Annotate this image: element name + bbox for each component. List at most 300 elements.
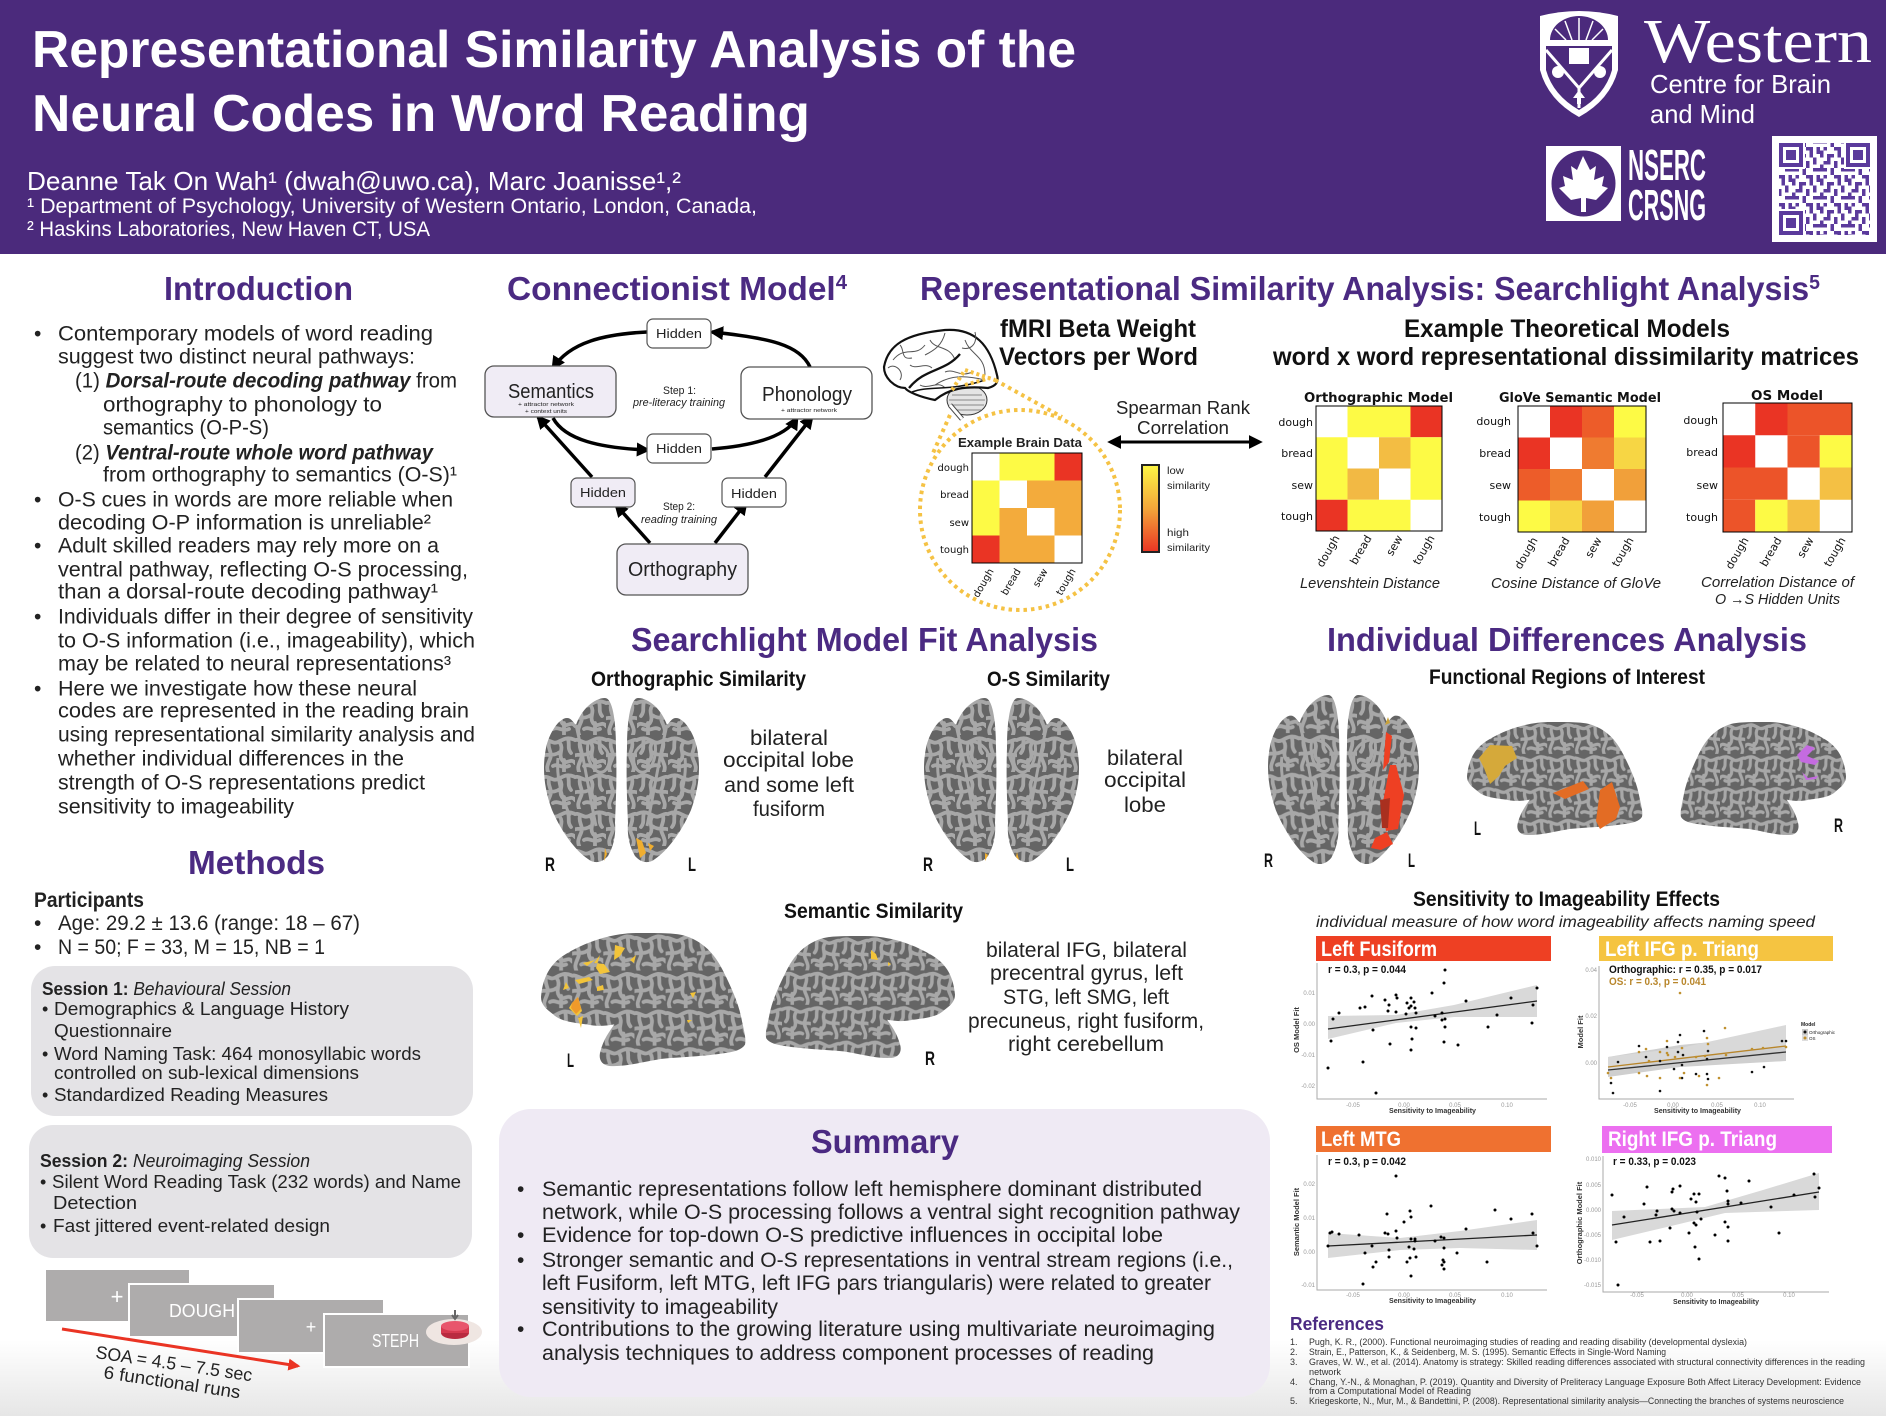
node: Hidden top: Hidden xyxy=(656,326,702,341)
summary bullet list: Contributions to the growing literature using multivariate neuroimaging xyxy=(542,1318,1215,1341)
session 2 card: • xyxy=(40,1216,46,1236)
heatmap: orthographic model: Orthographic Model xyxy=(1304,391,1453,406)
scatter plot: Left Fusiform xyxy=(1292,936,1551,1115)
icon: NSERC logo: NSERC xyxy=(1628,141,1706,190)
participants block: N = 50; F = 33, M = 15, NB = 1 xyxy=(58,936,325,959)
scatter plot: Left IFG p. Triang: 0.00 xyxy=(1667,1103,1679,1109)
heatmap: OS model: sew xyxy=(1795,535,1817,560)
node: Orthography: Orthography xyxy=(628,559,737,581)
reference list: Kriegeskorte, N., Mur, M., & Bandettini, P. (2008). Representational similarity analysis—Connecting the branches of systems neuroscience xyxy=(1309,1396,1844,1406)
scatter plot: Left MTG: Left MTG xyxy=(1321,1128,1401,1151)
session 1 card: • xyxy=(42,1085,48,1105)
legend: similarity colour bar: high xyxy=(1167,527,1189,539)
scatter plot: Left MTG: 0.02 xyxy=(1303,1182,1316,1188)
subheading: example theoretical models: word x word representational dissimilarity matrices xyxy=(1272,343,1859,371)
description xyxy=(723,727,854,821)
authors and affiliations: ¹ Department of Psychology, University of Western Ontario, London, Canada, xyxy=(27,195,757,218)
introduction bullet list: may be related to neural representations³ xyxy=(58,652,451,676)
scatter plot: Left IFG p. Triang: 0.04 xyxy=(1585,968,1598,974)
logo text: Western Centre for Brain and Mind: Centre for Brain xyxy=(1650,69,1831,99)
introduction bullet list: sensitivity to imageability xyxy=(58,796,295,818)
introduction bullet list: suggest two distinct neural pathways: xyxy=(58,346,415,368)
scatter plot: Left IFG p. Triang: 0.10 xyxy=(1754,1103,1766,1109)
heading: Connectionist Model: 4 xyxy=(836,272,848,294)
scatter plot: Left Fusiform: r = 0.3, p = 0.044 xyxy=(1328,964,1407,976)
summary bullet list xyxy=(517,1178,1241,1365)
scatter plot: Right IFG p. Triang: -0.010 xyxy=(1584,1258,1602,1264)
node: Semantics: + context units xyxy=(525,409,567,415)
stimulus timeline: + xyxy=(111,1284,123,1309)
arrow: trial timeline xyxy=(62,1329,298,1366)
heatmap: example brain data: sew xyxy=(949,518,969,529)
introduction bullet list: • xyxy=(34,678,41,700)
scatter plot: Left MTG: Semantic Model Fit xyxy=(1292,1187,1301,1256)
heading: Introduction: Introduction xyxy=(164,270,353,307)
heatmap: GloVe semantic model: GloVe Semantic Model xyxy=(1499,391,1661,406)
description: precuneus, right fusiform, xyxy=(968,1010,1204,1033)
heatmap: GloVe semantic model: Cosine Distance of GloVe xyxy=(1491,575,1661,592)
summary bullet list: Semantic representations follow left hemisphere dominant distributed xyxy=(542,1178,1202,1201)
scatter plot: Left MTG xyxy=(1292,1126,1551,1305)
brain: ventral view with fusiform ROI xyxy=(1268,695,1419,864)
legend: similarity colour bar: similarity xyxy=(1167,480,1211,492)
subpanel: semantic similarity: Semantic Similarity xyxy=(784,900,963,923)
node: Orthography xyxy=(617,544,748,595)
subheading: functional regions of interest: Functional Regions of Interest xyxy=(1429,666,1705,689)
heatmap: orthographic model: bread xyxy=(1281,447,1313,460)
scatter plot: Right IFG p. Triang: 0.00 xyxy=(1681,1293,1693,1299)
logo text: Western Centre for Brain and Mind xyxy=(1644,8,1872,129)
node: Hidden middle: Hidden xyxy=(656,441,702,456)
scatter plot: Right IFG p. Triang: 0.10 xyxy=(1783,1293,1795,1299)
scatter plot: Right IFG p. Triang: 0.005 xyxy=(1586,1183,1602,1189)
stimulus timeline: + xyxy=(306,1317,316,1337)
subheading: example theoretical models: Example Theoretical Models xyxy=(1404,315,1730,343)
panel: individual differences analysis: L xyxy=(1408,851,1415,872)
heatmap: OS model: dough xyxy=(1723,535,1752,571)
node: Phonology: Phonology xyxy=(762,384,852,406)
session 1 card: Demographics & Language History xyxy=(54,999,349,1019)
node: Semantics: + attractor network xyxy=(518,402,574,408)
subheading: sensitivity to imageability: individual measure of how word imageability affects naming speed xyxy=(1316,914,1816,931)
description: occipital lobe xyxy=(723,749,854,772)
introduction bullet list: Individuals differ in their degree of sensitivity xyxy=(58,606,473,628)
panel: individual differences analysis: R xyxy=(1264,851,1273,872)
reference list xyxy=(1290,1337,1865,1406)
panel: references xyxy=(1290,1314,1865,1406)
reference list: network xyxy=(1309,1367,1342,1377)
scatter plot: Left Fusiform: OS Model Fit xyxy=(1292,1007,1301,1053)
description: right cerebellum xyxy=(1008,1033,1164,1056)
introduction bullet list: Adult skilled readers may rely more on a xyxy=(58,534,439,558)
scatter plot: Left Fusiform: 0.00 xyxy=(1398,1103,1410,1109)
introduction bullet list xyxy=(34,322,475,818)
scatter plot: Left MTG: 0.05 xyxy=(1449,1293,1461,1299)
introduction bullet list: Here we investigate how these neural xyxy=(58,678,417,700)
heading: Summary: Summary xyxy=(811,1123,960,1160)
description xyxy=(968,939,1204,1056)
heatmap: OS model: bread xyxy=(1686,446,1718,459)
subpanel: orthographic similarity xyxy=(544,668,854,876)
scatter plot: Left IFG p. Triang: Left IFG p. Triang xyxy=(1605,938,1759,961)
scatter plot: Left Fusiform: -0.02 xyxy=(1301,1084,1316,1090)
heatmap: GloVe semantic model: tough xyxy=(1479,511,1511,524)
description: and some left xyxy=(724,774,854,797)
scatter plot: Right IFG p. Triang: -0.05 xyxy=(1630,1293,1644,1299)
scatter plot: Right IFG p. Triang: Orthographic Model Fit xyxy=(1575,1181,1584,1264)
heatmap: orthographic model: tough xyxy=(1281,510,1313,523)
scatter plot: Left MTG: 0.00 xyxy=(1398,1293,1410,1299)
node: Phonology xyxy=(741,367,872,419)
scatter plot: Right IFG p. Triang xyxy=(1575,1126,1832,1306)
introduction bullet list: than a dorsal-route decoding pathway¹ xyxy=(58,580,438,604)
heading: Connectionist Model: Connectionist Model xyxy=(507,270,832,307)
heading: RSA searchlight: 5 xyxy=(1809,272,1820,294)
description: fusiform xyxy=(753,798,825,821)
page background fade xyxy=(0,1340,1886,1416)
description: bilateral xyxy=(750,727,828,750)
label: Step 2 xyxy=(641,501,718,526)
session 1 card: Session 1: Behavioural Session xyxy=(42,979,291,999)
session 1 card: controlled on sub-lexical dimensions xyxy=(54,1063,359,1083)
panel: connectionist model xyxy=(485,270,872,595)
reference list: Graves, W. W., et al. (2014). Anatomy is strategy: Skilled reading differences associated with structural connectivity differences in the reading xyxy=(1309,1357,1865,1367)
diagram: triangle model arrows xyxy=(538,332,812,543)
heatmap: GloVe semantic model: bread xyxy=(1545,535,1573,569)
node: Hidden right: Hidden xyxy=(731,486,777,501)
heading: References: References xyxy=(1290,1314,1384,1334)
label: Step 2: reading training xyxy=(641,514,718,526)
session 1 card: Standardized Reading Measures xyxy=(54,1085,328,1105)
heatmap: example brain data: Example Brain Data xyxy=(958,436,1083,450)
panel: representational similarity analysis xyxy=(884,270,1859,610)
summary bullet list: • xyxy=(517,1178,524,1201)
heading: Individual Differences Analysis: Individual Differences Analysis xyxy=(1327,621,1807,658)
summary bullet list: analysis techniques to address component processes of reading xyxy=(542,1342,1154,1365)
subpanel: O-S similarity: O-S Similarity xyxy=(987,668,1110,691)
reference list: Pugh, K. R., (2000). Functional neuroimaging studies of reading and reading disability (developmental dyslexia) xyxy=(1309,1337,1747,1347)
heatmap: OS model xyxy=(1683,389,1856,608)
introduction bullet list: • xyxy=(34,488,41,512)
brain: ventral view xyxy=(924,698,1079,862)
scatter plot: Right IFG p. Triang: -0.005 xyxy=(1584,1233,1602,1239)
heatmap: OS model: OS Model xyxy=(1751,389,1823,404)
reference list: 3. xyxy=(1290,1357,1298,1367)
heatmap: OS model: sew xyxy=(1696,479,1718,492)
description: occipital xyxy=(1104,769,1186,792)
heatmap: OS model: O →S Hidden Units xyxy=(1715,591,1840,608)
stimulus timeline: DOUGH xyxy=(169,1301,235,1321)
subpanel: O-S similarity xyxy=(923,668,1186,876)
introduction bullet list: whether individual differences in the xyxy=(57,748,404,770)
panel: summary xyxy=(499,1109,1270,1397)
scatter plot: Left IFG p. Triang: -0.05 xyxy=(1623,1103,1637,1109)
subheading: fMRI beta weight vectors: fMRI Beta Weight xyxy=(1000,315,1197,343)
heading: Methods: Methods xyxy=(188,844,325,881)
subpanel: O-S similarity: L xyxy=(1066,855,1074,876)
icon: brain line drawing xyxy=(884,330,998,419)
heading: RSA searchlight: Representational Similarity Analysis: Searchlight Analysis xyxy=(920,270,1833,307)
legend: similarity colour bar: similarity xyxy=(1167,542,1211,554)
summary bullet list: left Fusiform, left MTG, left IFG pars triangularis) were related to greater xyxy=(542,1272,1211,1295)
heatmap: GloVe semantic model: dough xyxy=(1512,535,1541,571)
icon: QR code xyxy=(1772,136,1877,242)
scatter plot: Right IFG p. Triang: 0.05 xyxy=(1732,1293,1744,1299)
reference list: 5. xyxy=(1290,1396,1298,1406)
introduction bullet list: using representational similarity analysis and xyxy=(58,724,475,746)
subheading: fMRI beta weight vectors xyxy=(999,315,1198,371)
reference list: Strain, E., Patterson, K., & Seidenberg, M. S. (1995). Semantic Effects in Single-Word Naming xyxy=(1309,1347,1666,1357)
brain: right lateral with IFG ROI xyxy=(1681,722,1846,835)
summary bullet list: • xyxy=(517,1224,524,1247)
introduction bullet list: strength of O-S representations predict xyxy=(58,772,425,794)
scatter plot: Left Fusiform: 0.01 xyxy=(1303,991,1316,997)
legend: model: Model xyxy=(1801,1022,1816,1028)
authors and affiliations: Deanne Tak On Wah¹ (dwah@uwo.ca), Marc Joanisse¹,² xyxy=(27,166,681,196)
heatmap: GloVe semantic model: bread xyxy=(1479,447,1511,460)
introduction bullet list: (1) Dorsal-route decoding pathway from xyxy=(75,370,457,392)
description: bilateral xyxy=(1107,747,1183,770)
heatmap: example brain data: tough xyxy=(940,545,969,556)
brain: left lateral xyxy=(541,933,745,1066)
legend: model: OS xyxy=(1809,1036,1816,1041)
scatter plot: Left IFG p. Triang: Sensitivity to Imageability xyxy=(1654,1106,1742,1115)
poster title: Neural Codes in Word Reading xyxy=(32,85,810,143)
summary bullet list: • xyxy=(517,1318,524,1341)
introduction bullet list: from orthography to semantics (O-S)¹ xyxy=(103,464,457,486)
heatmap: OS model: Correlation Distance of xyxy=(1701,574,1856,591)
node: Hidden middle xyxy=(647,434,711,463)
panel: introduction xyxy=(34,270,475,818)
node: Hidden right xyxy=(722,478,786,507)
panel: methods xyxy=(29,844,482,1402)
scatter plot: Left IFG p. Triang: 0.05 xyxy=(1711,1103,1723,1109)
heatmap: example brain data: sew xyxy=(1031,567,1051,589)
brain: left lateral with IFG and MTG ROIs xyxy=(1467,722,1642,835)
node: Hidden left: Hidden xyxy=(580,485,626,500)
stimulus timeline: STEPH xyxy=(372,1331,419,1351)
scatter plot: Right IFG p. Triang: 0.000 xyxy=(1586,1208,1602,1214)
heatmap: orthographic model: sew xyxy=(1384,533,1406,558)
subheading: example theoretical models xyxy=(1272,315,1859,371)
scatter plot: Left Fusiform: Sensitivity to Imageability xyxy=(1389,1106,1477,1115)
session 2 card: Detection xyxy=(53,1193,137,1213)
session 1 card xyxy=(31,966,473,1116)
scatter plot: Right IFG p. Triang: Sensitivity to Imageability xyxy=(1673,1297,1760,1306)
subheading: sensitivity to imageability xyxy=(1316,888,1816,931)
summary bullet list: network, while O-S processing follows a ventral sight recognition pathway xyxy=(542,1201,1241,1224)
heatmap: example brain data: dough xyxy=(971,567,997,600)
subpanel: orthographic similarity: R xyxy=(545,855,555,876)
session 1 card: Word Naming Task: 464 monosyllabic words xyxy=(54,1044,421,1064)
brain: ventral view xyxy=(544,698,699,862)
label: Step 1: Step 1: xyxy=(663,385,696,397)
scatter plot: Left IFG p. Triang: OS: r = 0.3, p = 0.041 xyxy=(1609,976,1706,988)
icon: NSERC logo xyxy=(1546,141,1706,230)
subpanel: semantic similarity xyxy=(541,900,1204,1072)
scatter plot: Left Fusiform: Left Fusiform xyxy=(1321,938,1437,961)
introduction bullet list: to O-S information (i.e., imageability), which xyxy=(58,630,475,652)
icon: response button xyxy=(426,1310,482,1345)
reference list: from a Computational Model of Reading xyxy=(1309,1386,1471,1396)
poster title xyxy=(32,21,1076,143)
node: Hidden left xyxy=(571,478,635,507)
heatmap: OS model: tough xyxy=(1821,535,1849,569)
reference list: 4. xyxy=(1290,1377,1298,1387)
SOA caption: SOA = 4.5 – 7.5 sec xyxy=(94,1342,254,1385)
heatmap: orthographic model: sew xyxy=(1292,479,1313,492)
subpanel: orthographic similarity: Orthographic Similarity xyxy=(591,668,806,691)
session 2 card: Session 2: Neuroimaging Session xyxy=(40,1151,310,1171)
callout: dotted zoom circle xyxy=(920,380,1120,610)
scatter plot: Left Fusiform: 0.00 xyxy=(1303,1022,1316,1028)
heatmap: orthographic model xyxy=(1278,391,1453,592)
introduction bullet list: semantics (O-P-S) xyxy=(103,416,269,440)
header band xyxy=(0,0,1886,254)
panel: individual differences analysis: L xyxy=(1474,819,1481,840)
session 1 card: Questionnaire xyxy=(54,1021,172,1041)
description: STG, left SMG, left xyxy=(1003,986,1169,1009)
introduction bullet list: Contemporary models of word reading xyxy=(58,322,433,346)
scatter plot: Left Fusiform: -0.01 xyxy=(1301,1053,1316,1059)
heatmap: orthographic model: dough xyxy=(1314,533,1343,569)
introduction bullet list: codes are represented in the reading brain xyxy=(58,700,469,722)
participants block: Age: 29.2 ± 13.6 (range: 18 – 67) xyxy=(58,912,360,935)
scatter plot: Left MTG: 0.10 xyxy=(1501,1293,1513,1299)
introduction bullet list: decoding O-P information is unreliable² xyxy=(58,512,431,534)
participants block: • xyxy=(34,936,41,959)
scatter plot: Left Fusiform: 0.05 xyxy=(1449,1103,1461,1109)
heatmap: orthographic model: dough xyxy=(1278,416,1313,429)
subpanel: semantic similarity: R xyxy=(925,1049,935,1070)
node: Hidden top xyxy=(647,319,711,348)
participants block: • xyxy=(34,912,41,935)
node: Phonology: + attractor network xyxy=(781,408,837,414)
introduction bullet list: orthography to phonology to xyxy=(103,394,382,416)
introduction bullet list: • xyxy=(34,322,41,346)
icon: Western University crest xyxy=(1540,11,1618,117)
description: lobe xyxy=(1124,794,1166,817)
heatmap: example brain data: bread xyxy=(1000,567,1024,598)
session 2 card xyxy=(29,1125,472,1258)
subpanel: O-S similarity: R xyxy=(923,855,933,876)
logo text: Western Centre for Brain and Mind: Western xyxy=(1644,8,1872,76)
heatmap: GloVe semantic model: sew xyxy=(1490,479,1511,492)
summary bullet list: • xyxy=(517,1249,524,1272)
reference list: Chang, Y.-N., & Monaghan, P. (2019). Quantity and Diversity of Preliteracy Language Exposure Both Affect Literacy Development: Evidence xyxy=(1309,1377,1861,1387)
label: Step 1: pre-literacy training xyxy=(632,397,726,409)
panel: individual differences analysis xyxy=(1264,621,1846,1306)
heatmap: OS model: bread xyxy=(1757,535,1785,569)
panel: individual differences analysis: R xyxy=(1834,816,1843,837)
session 1 card: • xyxy=(42,999,48,1019)
introduction bullet list: (2) Ventral-route whole word pathway xyxy=(75,442,434,464)
description xyxy=(1104,747,1186,817)
heatmap: orthographic model: tough xyxy=(1410,533,1438,567)
description: bilateral IFG, bilateral xyxy=(986,939,1187,962)
brain: right lateral xyxy=(766,936,955,1058)
heatmap: example brain data: dough xyxy=(938,463,969,474)
scatter plot: Left MTG: 0.00 xyxy=(1303,1250,1316,1256)
logo text: Western Centre for Brain and Mind: and Mind xyxy=(1650,99,1755,129)
scatter plot: Right IFG p. Triang: Right IFG p. Triang xyxy=(1608,1128,1777,1151)
introduction bullet list: • xyxy=(34,534,41,558)
heatmap: GloVe semantic model: tough xyxy=(1609,535,1637,569)
session 2 card: Silent Word Reading Task (232 words) and Name xyxy=(52,1172,461,1192)
authors and affiliations: ² Haskins Laboratories, New Haven CT, USA xyxy=(27,218,430,241)
introduction bullet list: ventral pathway, reflecting O-S processing, xyxy=(58,558,468,582)
subheading: sensitivity to imageability: Sensitivity to Imageability Effects xyxy=(1413,888,1720,911)
heatmap: GloVe semantic model: dough xyxy=(1476,415,1511,428)
header band: CRSNG xyxy=(1628,181,1706,230)
arrow: Spearman rank correlation: Correlation xyxy=(1137,418,1229,438)
poster title: Representational Similarity Analysis of the xyxy=(32,21,1076,79)
summary bullet list: Evidence for top-down O-S predictive influences in occipital lobe xyxy=(542,1224,1163,1247)
heatmap: orthographic model: Levenshtein Distance xyxy=(1300,575,1440,592)
scatter plot: Left IFG p. Triang: 0.00 xyxy=(1585,1061,1598,1067)
panel: searchlight model fit analysis xyxy=(541,621,1204,1072)
scatter plot: Left MTG: 0.01 xyxy=(1303,1216,1316,1222)
session 2 card: • xyxy=(40,1172,46,1192)
scatter plot: Left IFG p. Triang xyxy=(1576,936,1836,1115)
scatter plot: Left Fusiform: -0.05 xyxy=(1346,1103,1360,1109)
subheading: fMRI beta weight vectors: Vectors per Word xyxy=(999,343,1198,371)
reference list: 2. xyxy=(1290,1347,1298,1357)
label: Step 2: Step 2: xyxy=(663,501,695,513)
arrow: Spearman rank correlation xyxy=(1110,398,1260,442)
heading: Searchlight Model Fit Analysis: Searchlight Model Fit Analysis xyxy=(631,621,1098,658)
stimulus timeline xyxy=(46,1270,482,1402)
heatmap: example brain data xyxy=(938,436,1083,600)
summary bullet list: sensitivity to imageability xyxy=(542,1296,779,1319)
scatter plot: Right IFG p. Triang: r = 0.33, p = 0.023 xyxy=(1613,1156,1696,1168)
scatter plot: Left Fusiform: 0.10 xyxy=(1501,1103,1513,1109)
heatmap: OS model: tough xyxy=(1686,511,1718,524)
heatmap: OS model: dough xyxy=(1683,414,1718,427)
legend: model xyxy=(1801,1022,1836,1041)
scatter plot: Left IFG p. Triang: Orthographic: r = 0.35, p = 0.017 xyxy=(1609,964,1762,976)
heatmap: GloVe semantic model: sew xyxy=(1583,535,1605,560)
node: Semantics: Semantics xyxy=(508,381,594,403)
introduction bullet list: O-S cues in words are more reliable when xyxy=(58,488,453,512)
scatter plot: Left MTG: -0.05 xyxy=(1346,1293,1360,1299)
introduction bullet list: • xyxy=(34,606,41,628)
reference list: 1. xyxy=(1290,1337,1298,1347)
summary bullet list: Stronger semantic and O-S representations in ventral stream regions (i.e., xyxy=(542,1249,1233,1272)
subpanel: orthographic similarity: L xyxy=(688,855,696,876)
scatter plot: Right IFG p. Triang: -0.015 xyxy=(1584,1283,1602,1289)
heatmap: GloVe semantic model xyxy=(1476,391,1661,592)
scatter plot: Left MTG: r = 0.3, p = 0.042 xyxy=(1328,1156,1406,1168)
node: Semantics xyxy=(485,366,616,417)
subpanel: semantic similarity: L xyxy=(567,1051,574,1072)
heatmap: example brain data: bread xyxy=(940,490,969,501)
SOA caption: 6 functional runs xyxy=(102,1362,242,1402)
legend: similarity colour bar: low xyxy=(1167,465,1184,477)
participants block xyxy=(34,889,360,959)
participants block: Participants xyxy=(34,889,144,912)
legend: similarity colour bar xyxy=(1142,465,1211,554)
session 1 card: • xyxy=(42,1044,48,1064)
heatmap: example brain data: tough xyxy=(1055,567,1079,598)
heatmap: orthographic model: bread xyxy=(1347,533,1375,567)
scatter plot: Left IFG p. Triang: 0.02 xyxy=(1585,1014,1598,1020)
legend: model: Orthographic xyxy=(1809,1030,1836,1035)
scatter plot: Left MTG: Sensitivity to Imageability xyxy=(1389,1296,1477,1305)
scatter plot: Left MTG: -0.01 xyxy=(1301,1283,1316,1289)
label: Step 1 xyxy=(632,385,726,409)
arrow: Spearman rank correlation: Spearman Rank xyxy=(1116,398,1251,418)
